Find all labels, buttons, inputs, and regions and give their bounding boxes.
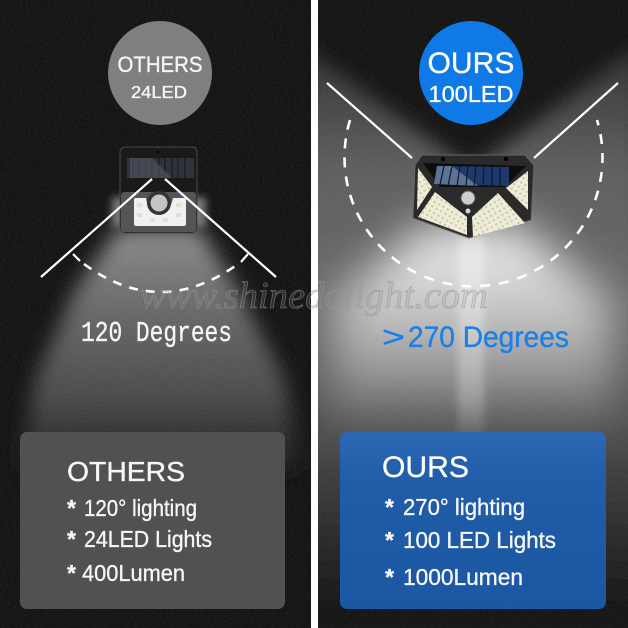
spec list: * bbox=[385, 494, 394, 520]
wide light spread: ours bbox=[318, 48, 628, 579]
lamp: ours bbox=[413, 155, 534, 238]
label: 120 Degrees: 120 Degrees bbox=[81, 317, 232, 350]
spec list: * bbox=[67, 526, 76, 552]
label: >270 Degrees: 270 Degrees bbox=[408, 321, 569, 354]
badge: ours 100LED: OURS bbox=[428, 47, 514, 80]
solar panel bbox=[127, 158, 194, 178]
angle lines: others bbox=[41, 179, 276, 277]
motion sensor bbox=[147, 191, 171, 215]
LED dots bbox=[137, 203, 181, 222]
spec list: * bbox=[67, 560, 76, 586]
panel: ours bbox=[318, 0, 628, 628]
spec list: 24LED Lights bbox=[84, 526, 212, 552]
LED panels bbox=[417, 168, 528, 237]
card: ours bbox=[340, 432, 606, 609]
card heading: OURS bbox=[382, 451, 469, 484]
wall texture bbox=[318, 0, 628, 628]
dark wall background bbox=[318, 0, 628, 628]
label: >270 Degrees: > bbox=[382, 321, 405, 354]
spec list: 120° lighting bbox=[84, 495, 197, 521]
badge: others 24LED: OTHERS bbox=[118, 52, 202, 77]
angle lines: ours bbox=[327, 83, 618, 158]
wall texture bbox=[0, 0, 311, 628]
panel: others bbox=[0, 0, 311, 628]
badge: others 24LED: 24LED bbox=[131, 82, 187, 102]
bright beam: ours bbox=[325, 225, 620, 440]
spec list: * bbox=[385, 564, 394, 590]
central light streak bbox=[458, 238, 484, 440]
watermark: www.shinedolight.com bbox=[140, 275, 488, 317]
motion sensor bbox=[461, 191, 475, 214]
spec list: 1000Lumen bbox=[403, 564, 523, 590]
dark wall background bbox=[0, 0, 311, 628]
spec list: 400Lumen bbox=[82, 560, 185, 586]
label: >270 Degrees bbox=[384, 326, 568, 354]
solar panel bbox=[423, 163, 526, 187]
spec list bbox=[385, 494, 556, 590]
spec list: * bbox=[385, 527, 394, 553]
lamp: others bbox=[120, 147, 197, 233]
spec list: 270° lighting bbox=[403, 494, 525, 520]
spec list bbox=[67, 495, 212, 586]
spec list: * bbox=[67, 495, 76, 521]
light beam: others bbox=[20, 228, 300, 470]
dashed arc: others bbox=[84, 264, 238, 292]
lamp side glow bbox=[112, 197, 206, 227]
card heading: OTHERS bbox=[67, 456, 185, 487]
card: others bbox=[20, 432, 285, 609]
badge: others 24LED bbox=[108, 21, 212, 125]
badge: ours 100LED bbox=[419, 21, 523, 125]
spec list: 100 LED Lights bbox=[403, 527, 556, 553]
badge: ours 100LED: 100LED bbox=[428, 81, 514, 107]
dashed arc: ours bbox=[344, 120, 602, 286]
LED array bbox=[134, 198, 186, 226]
